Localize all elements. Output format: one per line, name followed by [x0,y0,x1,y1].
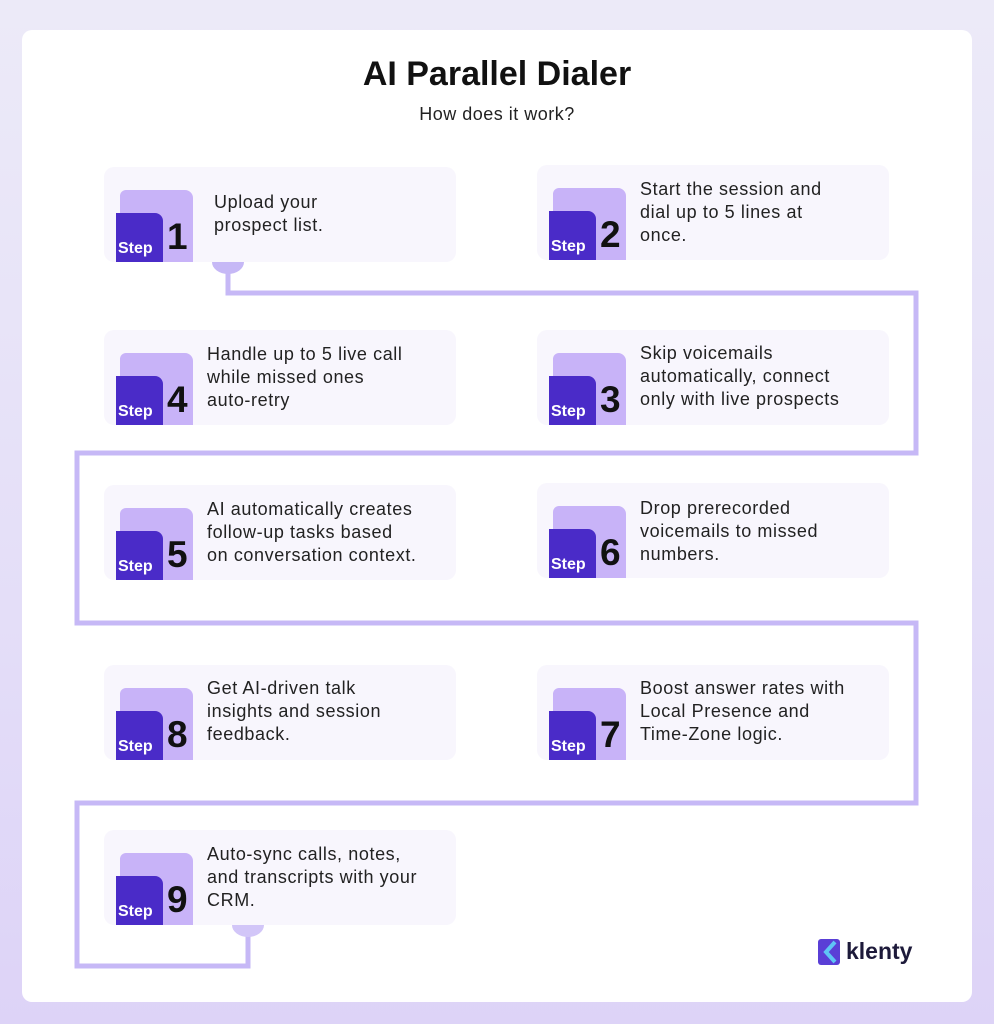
step 9 [104,830,456,925]
step 7: Step [551,738,586,755]
step 9: Auto-sync calls, notes, [207,844,401,864]
step 3: Skip voicemails [640,343,773,363]
step 2: dial up to 5 lines at [640,202,803,222]
step 9: Step [118,903,153,920]
step 3: 3 [600,379,621,420]
step 2: Step [551,238,586,255]
step 3 [537,330,889,425]
step 8: Get AI-driven talk [207,678,356,698]
step 1: 1 [167,216,188,257]
step 7: Local Presence and [640,701,810,721]
step 6 [537,483,889,578]
step 3: automatically, connect [640,366,830,386]
step 9: CRM. [207,890,255,910]
step 4: 4 [167,379,188,420]
step 7: Time-Zone logic. [640,724,783,744]
step 6: Drop prerecorded [640,498,791,518]
step 2 [537,165,889,260]
step 7: Boost answer rates with [640,678,845,698]
step 9: and transcripts with your [207,867,417,887]
step 8: feedback. [207,724,290,744]
step 2: once. [640,225,687,245]
step 4: auto-retry [207,390,290,410]
step 5: 5 [167,534,188,575]
logo: klenty [818,938,912,965]
subtitle: How does it work? [419,104,575,124]
step 7: 7 [600,714,621,755]
step 8: insights and session [207,701,381,721]
step 4: while missed ones [207,367,364,387]
step 8 [104,665,456,760]
step 5 [104,485,456,580]
step 4: Handle up to 5 live call [207,344,403,364]
step 2: 2 [600,214,621,255]
step 9: 9 [167,879,188,920]
step 1: Step [118,240,153,257]
step 6: Step [551,556,586,573]
step 8: Step [118,738,153,755]
step 5: follow-up tasks based [207,522,393,542]
step 6: 6 [600,532,621,573]
step 2: Start the session and [640,179,822,199]
step 3: only with live prospects [640,389,839,409]
step 1: Upload your [214,192,318,212]
logo: klenty: klenty [846,938,912,964]
title: AI Parallel Dialer [363,55,631,93]
step 1 [104,167,456,262]
step 4 [104,330,456,425]
step 5: on conversation context. [207,545,417,565]
step 5: Step [118,558,153,575]
step 5: AI automatically creates [207,499,412,519]
step 6: numbers. [640,544,720,564]
step 6: voicemails to missed [640,521,818,541]
step 8: 8 [167,714,188,755]
step 4: Step [118,403,153,420]
step 7 [537,665,889,760]
step 3: Step [551,403,586,420]
step 1: prospect list. [214,215,323,235]
